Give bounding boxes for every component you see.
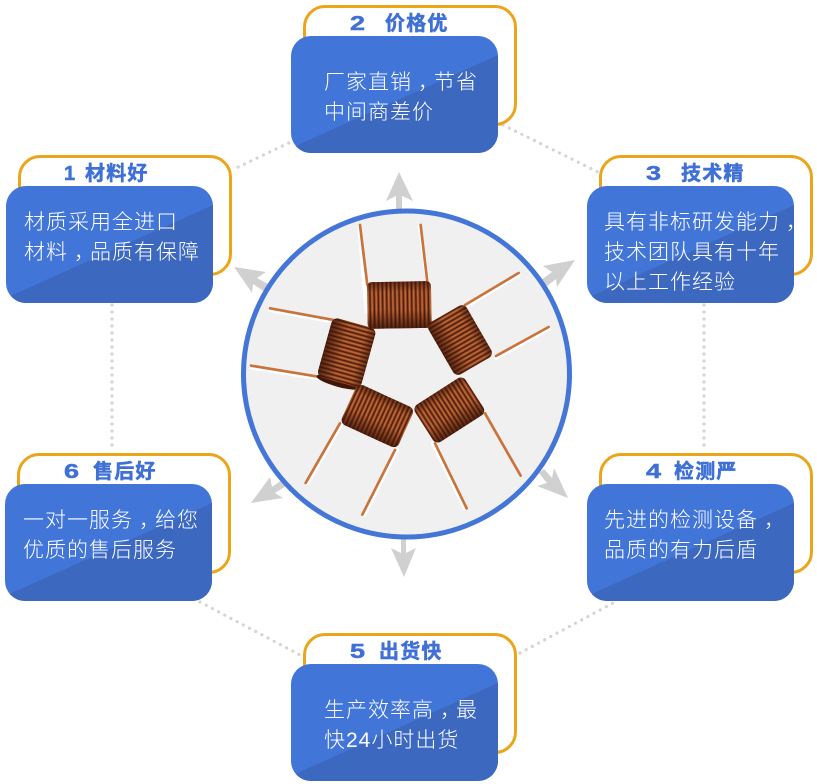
dotted connectors bbox=[112, 125, 704, 655]
heading bbox=[64, 460, 157, 483]
text block: 技术团队具有十年 bbox=[604, 241, 780, 264]
text block: 快24小时出货 bbox=[324, 729, 459, 752]
heading bbox=[350, 12, 449, 35]
panel: 5 出货快 bbox=[291, 633, 517, 781]
text block bbox=[587, 186, 794, 303]
arrow: upper right bbox=[541, 260, 575, 287]
heading: 技术精 bbox=[681, 163, 745, 185]
coil bottom right bbox=[412, 375, 486, 445]
heading bbox=[646, 162, 745, 185]
heading: 2 bbox=[350, 13, 365, 35]
arrow: lower left bbox=[251, 477, 286, 503]
heading: 4 bbox=[646, 461, 661, 483]
heading: 出货快 bbox=[379, 641, 443, 663]
text block: 生产效率高 ，最 bbox=[324, 699, 478, 722]
heading: 价格优 bbox=[385, 13, 449, 35]
panel: 1 材料好 bbox=[6, 155, 232, 303]
text block bbox=[291, 36, 498, 153]
text block bbox=[6, 186, 213, 303]
text block: 材料 ，品质有保障 bbox=[24, 241, 200, 264]
heading: 6 bbox=[64, 461, 79, 483]
text block: 厂家直销 ，节省 bbox=[324, 71, 478, 94]
panel frame bbox=[599, 155, 813, 276]
panel frame bbox=[18, 155, 232, 276]
panel frame bbox=[599, 453, 813, 574]
text block bbox=[291, 664, 498, 781]
text block bbox=[587, 484, 794, 601]
text block: 中间商差价 bbox=[324, 101, 434, 124]
heading: 5 bbox=[350, 641, 365, 663]
text block bbox=[5, 484, 212, 601]
text block: 先进的检测设备 ， bbox=[604, 509, 786, 532]
text block: 优质的售后服务 bbox=[23, 539, 177, 562]
heading: 材料好 bbox=[85, 163, 149, 185]
arrow: down bbox=[391, 538, 416, 577]
heading bbox=[646, 460, 738, 483]
arrow: upper left bbox=[234, 267, 270, 293]
heading: 检测严 bbox=[674, 461, 738, 483]
coil bottom left bbox=[340, 383, 415, 449]
text block: 品质的有力后盾 bbox=[604, 539, 758, 562]
text block: 一对一服务 ，给您 bbox=[23, 509, 199, 532]
arrow: up bbox=[386, 172, 413, 209]
lead highlights bbox=[251, 227, 549, 515]
coil right bbox=[426, 303, 494, 377]
panel frame bbox=[303, 633, 517, 754]
text block: 以上工作经验 bbox=[604, 271, 736, 294]
panel frame bbox=[303, 5, 517, 126]
coil leads bbox=[251, 225, 549, 515]
panel frame bbox=[17, 453, 231, 574]
central coil photo circle bbox=[244, 211, 570, 537]
text block: 材质采用全进口 bbox=[24, 211, 178, 234]
panel: 3 技术精 bbox=[587, 155, 813, 303]
panel: 4 检测严 bbox=[587, 453, 813, 601]
heading bbox=[350, 640, 443, 663]
text block: 具有非标研发能力 ， bbox=[604, 211, 808, 234]
coil top bbox=[367, 281, 432, 329]
heading: 3 bbox=[646, 163, 661, 185]
heading: 售后好 bbox=[93, 461, 157, 483]
arrow: lower right bbox=[537, 468, 568, 498]
heading: 1 bbox=[64, 163, 75, 185]
coil left bbox=[315, 317, 377, 393]
panel: 2 价格优 bbox=[291, 5, 517, 153]
panel: 6 售后好 bbox=[5, 453, 231, 601]
